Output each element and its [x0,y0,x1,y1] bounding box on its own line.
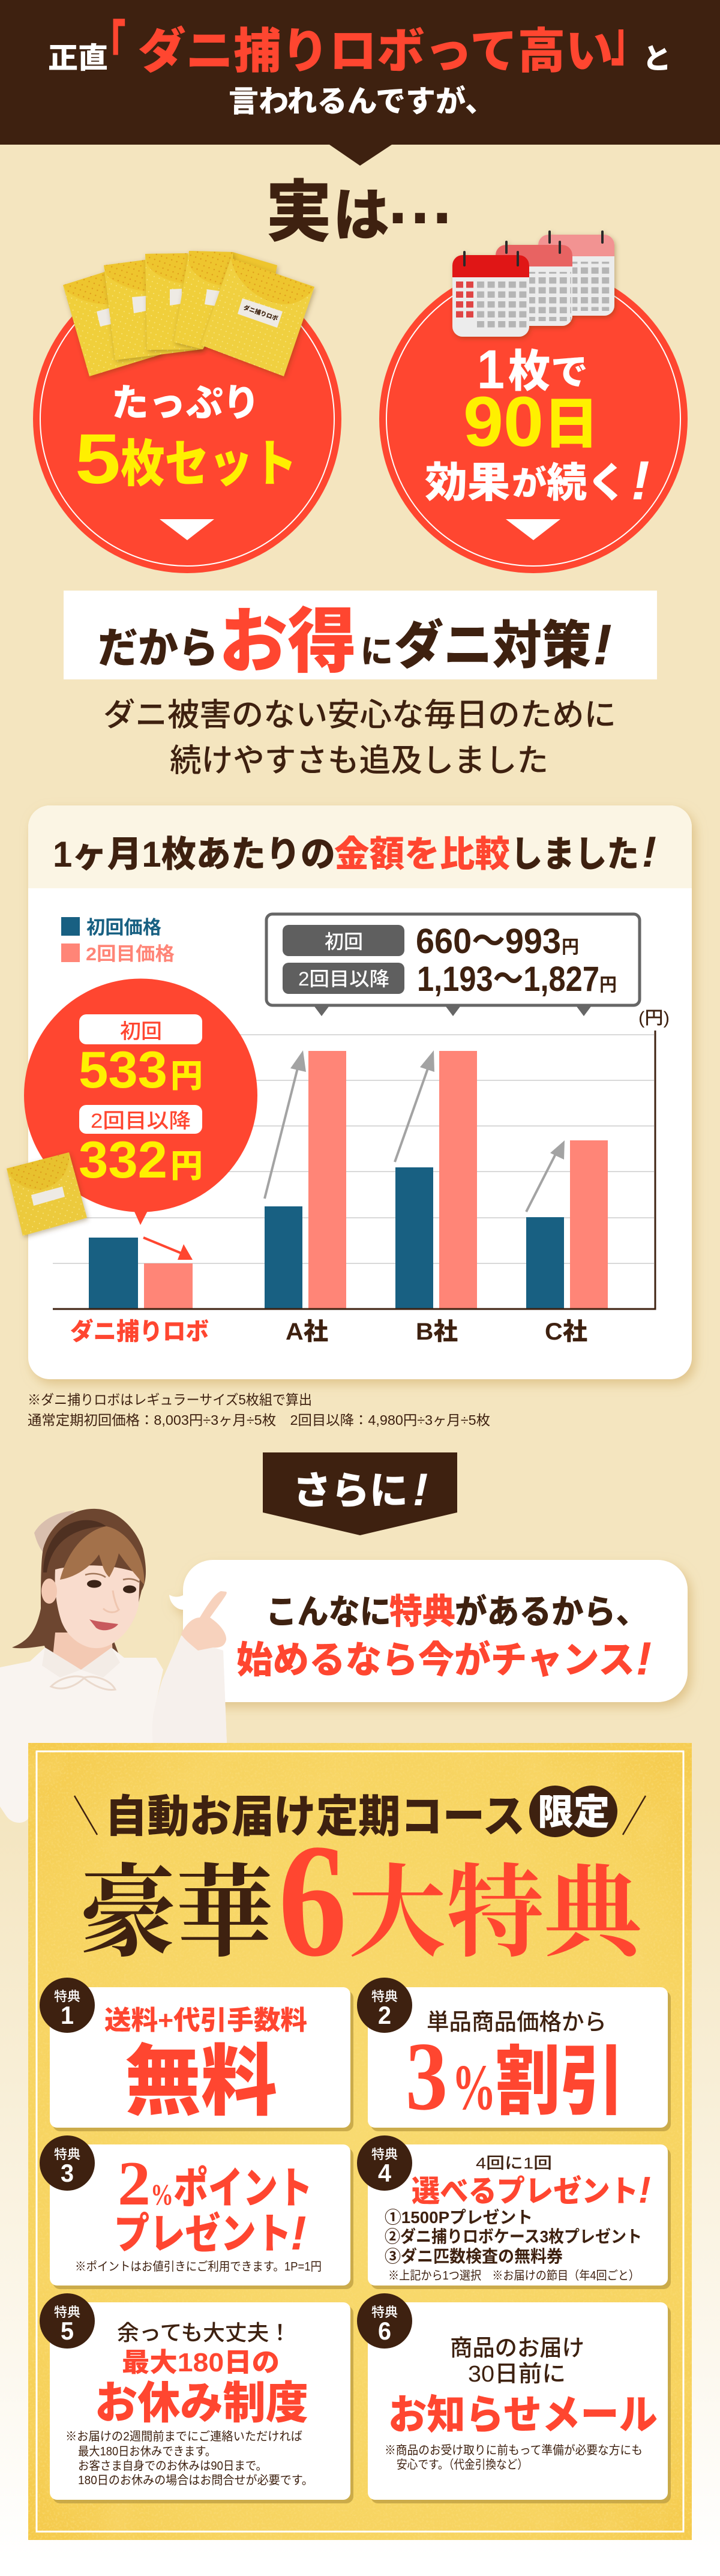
face [55,1565,140,1648]
badge 5: 特典 [54,2305,80,2320]
speech bubble [169,1560,688,1702]
collar bow [51,1676,115,1690]
card: bonus 2: 3 [406,2023,448,2131]
panel: six bonuses [28,1743,692,2540]
card: bonus 4 [357,2135,671,2289]
card: bonus 6: お知らせメール [388,2392,658,2438]
title: six bonuses: 大特典 [349,1858,653,1970]
text: chance line: 始めるなら今がチャンス [236,1639,635,1681]
text: bonus line: こんなに [266,1593,391,1631]
hair crown [43,1520,106,1572]
headline banner: ! [593,613,612,677]
card: bonus 1: 送料+代引手数料 [104,2006,307,2035]
callout: Dani Robo price: 円 [170,1058,203,1094]
sleeve [152,1636,227,1743]
bars: company B [395,1051,477,1309]
card: bonus 3: ポイント [173,2165,313,2213]
card: bonus 2: % [452,2052,496,2123]
bars: company C [526,1140,608,1309]
axis labels: C社 [545,1319,587,1345]
text: plenty: たっぷり [112,382,260,424]
card: bonus 4: ①1500Pプレゼント [385,2208,533,2227]
hair bow [34,1511,75,1554]
card: bonus 6: 30日前に [468,2362,566,2387]
icon: calendars [452,230,614,337]
badge 6: 6 [378,2317,391,2345]
badge 5 [40,2293,95,2349]
badge 5: 5 [61,2317,74,2345]
legend [61,917,175,964]
badge 4: 4 [378,2159,392,2187]
card: bonus 3: ※ポイントはお値引きにご利用できます。1P=1円 [75,2260,322,2274]
subheading [103,697,616,778]
notes [65,2430,313,2487]
card: bonus 6: 商品のお届け [450,2336,584,2361]
badge 3: 3 [61,2159,74,2187]
heading: compare monthly price [53,828,656,876]
text: one sheet: 1 [477,339,505,400]
badge 3 [40,2135,95,2191]
notes: 安心です。（代金引換など） [397,2458,528,2472]
headline banner: お得 [219,603,356,682]
card: bonus 5: 最大180日の [122,2348,280,2377]
panel: 5 sheet set circle [33,265,341,573]
legend: 初回価格 [86,917,161,938]
title: six bonuses: 6 [278,1811,347,1990]
ear [41,1578,57,1604]
title: six bonuses: 豪華 [80,1858,273,1970]
card: bonus 2: 割引 [496,2039,625,2124]
illustration: woman pointing [0,1509,227,1823]
banner: furthermore [263,1452,457,1535]
callout: Dani Robo price [24,978,257,1225]
footnote: ※ダニ捕りロボはレギュラーサイズ5枚組で算出 [28,1392,312,1407]
heading: compare monthly price: 金額を比較 [334,834,510,874]
arrow down [160,519,214,540]
icon: back calendar [538,230,614,316]
headline banner: に [361,634,393,670]
top banner: 言われるんですが、 [229,85,495,118]
badge 3: 特典 [54,2147,80,2162]
text: bonus line: があるから、 [455,1593,648,1631]
text: effect lasts: が [512,465,547,502]
card header [28,805,692,888]
badge 4: 特典 [371,2147,398,2162]
text: 90 days: 90 [463,382,544,462]
text: one sheet: で [551,352,588,393]
badge 2: 特典 [371,1989,398,2004]
bars: Dani Robo [89,1238,193,1309]
callout: Dani Robo price: 332 [79,1131,167,1189]
card: bonus 1 [40,1978,353,2131]
card: bonus 3: プレゼント [114,2210,292,2257]
text: effect lasts: 効果 [425,459,510,506]
callout: competitor prices: 円 [562,937,579,957]
card: bonus 3: 2 [118,2148,151,2218]
text: effect lasts: ! [631,450,650,511]
card: bonus 4: ! [638,2170,651,2211]
callout: competitor prices: 2回目以降 [298,968,389,990]
icon: five yellow packets: ダニ捕りロボ [242,304,279,322]
bangs [60,1526,144,1584]
badge 1: 特典 [54,1989,80,2004]
callout: Dani Robo price: 2回目以降 [91,1110,191,1133]
panel: price comparison card [7,805,692,1379]
mouth [89,1619,118,1630]
icon: middle calendar [496,241,572,326]
bars: company A [265,1051,346,1309]
notes: ※お届けの2週間前までにご連絡いただければ [65,2430,302,2443]
subheading: ダニ被害のない安心な毎日のために [103,697,616,733]
headline banner [64,591,657,682]
text: 5 sheet set [75,420,297,499]
card: bonus 3 [40,2135,353,2289]
eyes [87,1580,136,1593]
heading: actually [266,160,455,250]
badge 2: 2 [378,2001,391,2029]
text: 90 days: 日 [544,394,599,455]
text: chance line: ! [636,1632,652,1685]
heading: actually: は [333,184,389,248]
axis labels: B社 [416,1319,458,1345]
card: bonus 3: ! [290,2206,307,2260]
badge 6: 特典 [371,2305,398,2320]
yen unit: (円) [638,1008,670,1028]
card: bonus 4: 4回に1回 [476,2154,552,2172]
card: bonus 4: ※上記から1つ選択 ※お届けの節目（年4回ごと） [388,2269,640,2283]
text: 5 sheet set: 5 [75,420,121,499]
card: bonus 2 [357,1978,671,2131]
callout: Dani Robo price: 533 [79,1041,167,1099]
callout: competitor prices: 初回 [325,931,363,952]
top banner: ダニ捕りロボって高い [138,25,613,78]
heading: actually: … [385,160,455,238]
nose [103,1590,119,1612]
notes [385,2443,643,2472]
arrow: price drop [143,1238,193,1260]
heading: subscription only: 限定 [538,1792,610,1832]
neck [53,1633,113,1670]
card: bonus 3: % [151,2177,173,2211]
subheading: 続けやすさも追及しました [170,743,548,778]
notes: ※商品のお受け取りに前もって準備が必要な方にも [385,2443,643,2457]
badge 1: 1 [61,2001,74,2029]
callout: competitor prices [266,914,640,1016]
badge 2 [357,1978,412,2033]
text: bonus line: 特典 [389,1592,455,1631]
text: effect lasts [425,450,650,511]
footnote: 通常定期初回価格：8,003円÷3ヶ月÷5枚 2回目以降：4,980円÷3ヶ月÷5枚 [28,1412,490,1428]
hand [181,1591,227,1651]
notes: お客さま自身でのお休みは90日まで。 [78,2459,267,2473]
top banner: 正直 [48,43,108,74]
text: effect lasts: 続く [547,460,627,506]
eyebrows [85,1574,139,1582]
callout: competitor prices: 円 [599,975,617,995]
top banner: 」 [611,8,646,73]
icon: small packet [7,1152,87,1236]
card: bonus 5 [40,2293,353,2503]
banner: furthermore: さらに [293,1469,408,1512]
headline banner: だから [98,625,218,672]
axis labels [70,1318,587,1345]
badge 4 [357,2135,412,2191]
text: 5 sheet set: 枚セット [121,436,297,492]
badge 6 [357,2293,412,2349]
badge 1 [40,1978,95,2033]
heading: compare monthly price: 1ヶ月1枚あたりの [53,834,335,874]
arrow: company B rise [395,1050,434,1162]
bar chart [53,1031,655,1309]
arrow: company A rise [265,1050,306,1199]
notes: 180日のお休みの場合はお問合せが必要です。 [78,2473,313,2487]
card: bonus 6 [357,2293,671,2503]
heading: subscription only [74,1786,646,1841]
card: bonus 5: お休み制度 [95,2378,308,2428]
callout: Dani Robo price: 初回 [120,1020,162,1043]
collar [42,1648,120,1678]
blouse [0,1636,227,1823]
heading: compare monthly price: ! [642,828,656,876]
card: bonus 4: 選べるプレゼント [412,2174,638,2208]
card: bonus 5: 余っても大丈夫！ [117,2320,291,2345]
notes: 最大180日お休みできます。 [78,2445,216,2458]
top banner: 「 [91,16,126,80]
text: one sheet [477,339,588,400]
title: six bonuses [80,1811,653,1990]
headline banner: ダニ対策 [394,617,591,675]
panel: 90 days circle [379,265,688,573]
footnote [28,1392,490,1428]
legend: 2回目価格 [86,943,175,964]
icon: front calendar [452,251,530,337]
icon: five yellow packets [63,251,314,376]
heading: compare monthly price: しました [511,834,639,874]
text: bonus line [266,1592,648,1631]
text: 90 days [463,382,599,462]
top banner: と [643,43,671,75]
axis labels: ダニ捕りロボ [70,1318,209,1345]
text: one sheet: 枚 [508,346,550,396]
callout: Dani Robo price: 円 [170,1148,203,1184]
card: bonus 4: ③ダニ匹数検査の無料券 [385,2246,563,2266]
card: bonus 4: ②ダニ捕りロボケース3枚プレゼント [385,2227,642,2246]
heading: subscription only: 自動お届け定期コース [105,1792,525,1841]
callout: competitor prices: 1,193～1,827 [417,960,599,999]
top banner [0,0,720,166]
heading: actually: 実 [266,175,332,250]
card: bonus 2: 単品商品価格から [427,2010,607,2035]
arrow down [506,519,560,540]
hair back [12,1509,146,1664]
card: bonus 1: 無料 [125,2038,277,2125]
axis labels: A社 [286,1319,328,1345]
banner: furthermore: ! [413,1464,428,1515]
callout: competitor prices: 660～993 [416,922,561,961]
arrow: company C rise [526,1140,565,1212]
